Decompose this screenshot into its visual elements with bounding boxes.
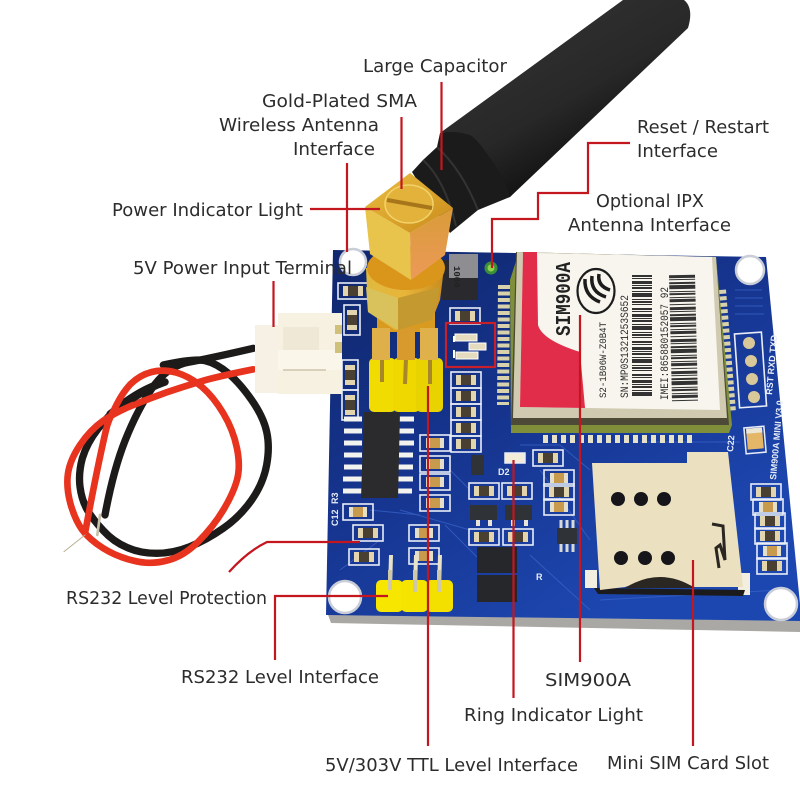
label: Reset / Restart Interface: Reset / Restart (637, 117, 769, 138)
pad block at right edge: RST RXD TXD (764, 334, 779, 395)
C22 capacitor (744, 426, 766, 454)
label: Optional IPX Antenna Interface: Optional IPX (596, 191, 704, 212)
part number lines: SN:MP0S1321253S652 (620, 295, 632, 398)
label: Gold-Plated SMA Wireless Antenna Interface: Interface (293, 139, 375, 160)
SOIC level-shifter chip (343, 412, 414, 498)
part number lines: S2-1B06W-Z0B4T (599, 322, 610, 398)
label: Gold-Plated SMA Wireless Antenna Interface: Wireless Antenna (219, 115, 379, 136)
label: Mini SIM Card Slot: Mini SIM Card Slot (607, 753, 769, 774)
collar ridge (423, 147, 478, 226)
elbow right face (410, 208, 453, 280)
label: Ring Indicator Light: Ring Indicator Light (464, 705, 643, 726)
slotted screw cap (385, 185, 433, 223)
white label (520, 252, 720, 410)
label: Gold-Plated SMA Wireless Antenna Interface: Gold-Plated SMA (262, 91, 418, 112)
label: Optional IPX Antenna Interface: Antenna Interface (568, 215, 731, 236)
reset button footprint (454, 334, 486, 359)
leader: RS232 interface (275, 596, 388, 660)
label: SIM900A: SIM900A (545, 670, 632, 691)
callout leader lines (229, 82, 693, 746)
silkscreen components: D2 (498, 467, 510, 477)
board edge (327, 612, 800, 632)
leader: wireless antenna interface (346, 163, 348, 252)
leader: 5V power input (272, 281, 275, 327)
silkscreen components: C22 (725, 435, 736, 452)
CCC mark (578, 269, 614, 313)
silkscreen components: R (536, 572, 543, 582)
leader: mini SIM slot (692, 560, 694, 746)
leader: SIM900A (579, 315, 581, 662)
wires: red and black power leads (64, 348, 268, 563)
black jumper blocks (477, 547, 517, 602)
leader: ring indicator (512, 460, 515, 698)
metal shield side (511, 252, 729, 425)
board surface (326, 250, 800, 621)
elbow top face (365, 173, 453, 233)
label: Reset / Restart Interface (637, 117, 769, 162)
small transistors and IC (470, 455, 577, 552)
silkscreen components: C12 (330, 509, 340, 526)
label: Reset / Restart Interface: Interface (637, 141, 718, 162)
label: Power Indicator Light: Power Indicator Light (112, 200, 303, 221)
part number lines: IMEI:865880152057 92 (660, 287, 672, 400)
castellated pads (503, 285, 730, 412)
power indicator LED (486, 263, 496, 273)
silkscreen components (330, 283, 787, 582)
label: Optional IPX Antenna Interface (568, 191, 731, 236)
leader: power indicator light (310, 208, 380, 210)
rubber antenna body (440, 0, 690, 197)
part number lines (599, 287, 672, 400)
circuit board (326, 249, 800, 632)
large tantalum capacitor: 1000 (451, 266, 461, 288)
barcodes (642, 275, 685, 402)
module base (510, 255, 732, 433)
silkscreen components: R3 (330, 492, 340, 504)
mini SIM card slot (585, 452, 750, 596)
yellow RS232 pin header (376, 555, 453, 612)
leader: gold-plated SMA (400, 117, 403, 189)
pad block at right edge: SIM900A MINI V3.0 (768, 400, 785, 480)
white power connector (255, 313, 342, 394)
pad block at right edge (734, 332, 785, 480)
label: RS232 Level Interface: RS232 Level Interface (181, 667, 379, 688)
ring indicator LED (505, 453, 525, 463)
label: RS232 Level Protection: RS232 Level Protection (66, 588, 267, 609)
mounting holes (329, 249, 797, 620)
leader: large capacitor (440, 82, 443, 170)
leader: RS232 protection (229, 542, 360, 572)
leader: TTL level (427, 386, 429, 746)
label: 5V/303V TTL Level Interface: 5V/303V TTL Level Interface (325, 755, 578, 776)
yellow jumper headers (369, 358, 443, 412)
label: Gold-Plated SMA Wireless Antenna Interface (219, 91, 418, 160)
red reset highlight box (446, 323, 495, 367)
SMA antenna (365, 0, 690, 412)
gold connector legs (372, 310, 438, 360)
model name: SIM900A (554, 262, 577, 336)
ring under elbow (367, 246, 445, 290)
large tantalum capacitor (442, 254, 478, 300)
antenna collar (412, 125, 520, 233)
label: Large Capacitor: Large Capacitor (363, 56, 508, 77)
red label corner (520, 252, 585, 408)
SIM900A module (503, 252, 732, 439)
faint copper traces (340, 290, 780, 610)
label: 5V Power Input Terminal: 5V Power Input Terminal (133, 258, 352, 279)
elbow left face (365, 207, 411, 280)
metal shield (513, 252, 727, 418)
lower hex nut (366, 268, 444, 330)
leader: reset / restart (492, 143, 630, 268)
